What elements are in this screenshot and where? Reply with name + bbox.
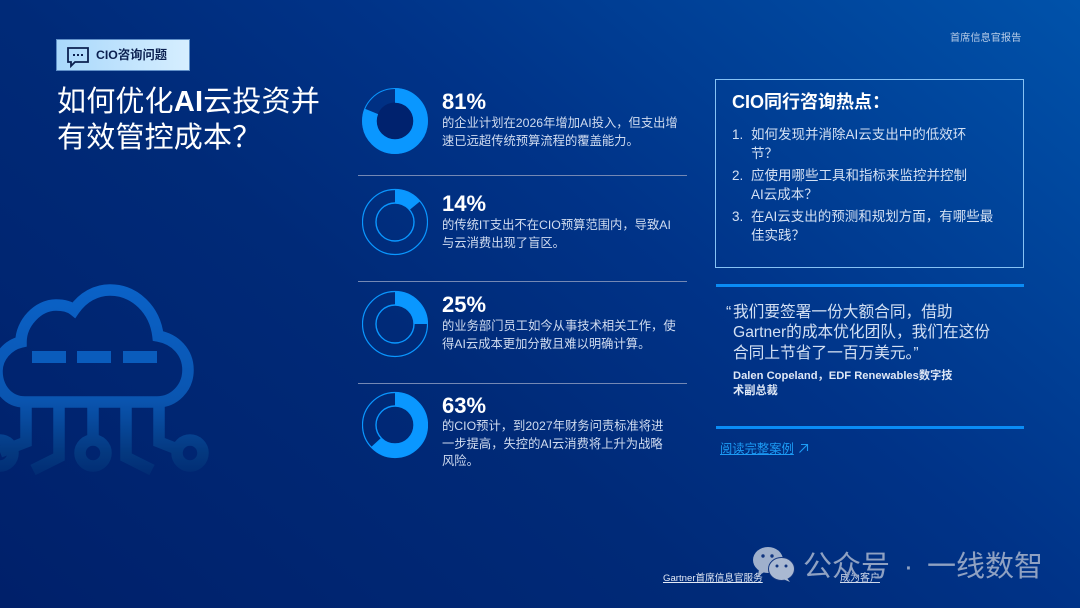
footer link: become client: 成为客户 <box>840 573 880 584</box>
question list: 佳实践？ <box>751 228 805 242</box>
question list: 1. <box>732 127 743 142</box>
icon: cloud network watermark <box>0 284 209 475</box>
title: 如何优化AI云投资并 <box>57 86 320 118</box>
value: 25% <box>442 292 486 317</box>
customer quote <box>726 303 990 362</box>
tag label: CIO咨询问题 <box>96 48 167 62</box>
title: 有效管控成本？ <box>57 122 261 154</box>
tag: CIO咨询问题 <box>56 39 190 71</box>
quote attribution: 术副总裁 <box>733 384 778 396</box>
description: 一步提高，失控的AI云消费将上升为战略 <box>442 436 663 450</box>
description: 的传统IT支出不在CIO预算范围内，导致AI <box>442 218 671 232</box>
panel: peer inquiry hot topics <box>715 79 1024 268</box>
stat: 25% <box>362 290 676 358</box>
description: 得AI云成本更加分散且难以明确计算。 <box>442 337 650 351</box>
question list: 3. <box>732 209 743 224</box>
donut chart: 63% <box>362 392 428 458</box>
quote attribution <box>733 369 952 396</box>
quote rule top <box>716 284 1024 287</box>
description: 的CIO预计，到2027年财务问责标准将进 <box>442 419 663 433</box>
description <box>442 419 663 468</box>
question list: 在AI云支出的预测和规划方面，有哪些最 <box>751 209 993 224</box>
description: 风险。 <box>442 454 479 468</box>
description <box>442 319 676 351</box>
link: read full case: 阅读完整案例 <box>720 442 794 456</box>
customer quote: 我们要签署一份大额合同，借助 <box>733 304 953 320</box>
value: 81% <box>442 89 486 114</box>
description: 速已远超传统预算流程的覆盖能力。 <box>442 134 639 148</box>
question list: 节？ <box>751 146 778 160</box>
value: 14% <box>442 191 486 216</box>
quote rule bottom <box>716 426 1024 429</box>
question list: 2. <box>732 168 743 183</box>
donut chart: 81% <box>362 88 428 154</box>
stat: 63% <box>362 392 663 468</box>
description: 的企业计划在2026年增加AI投入，但支出增 <box>442 116 678 130</box>
stat: 81% <box>362 88 678 154</box>
donut chart: 14% <box>362 188 428 256</box>
description: 的业务部门员工如今从事技术相关工作，使 <box>442 319 676 333</box>
question list <box>732 127 993 242</box>
question list: AI云成本？ <box>751 186 818 202</box>
title <box>57 86 320 154</box>
footer link: Gartner service: Gartner首席信息官服务 <box>663 573 763 584</box>
customer quote: 合同上节省了一百万美元。” <box>733 344 919 362</box>
quote attribution: Dalen Copeland，EDF Renewables数字技 <box>733 370 952 382</box>
icon: external arrow <box>799 444 808 453</box>
watermark: account name: · <box>904 551 913 583</box>
panel heading: CIO同行咨询热点： <box>732 92 890 112</box>
text: “ <box>726 304 731 320</box>
question list: 应使用哪些工具和指标来监控并控制 <box>751 168 967 183</box>
description <box>442 218 671 250</box>
description <box>442 116 678 148</box>
question list: 如何发现并消除AI云支出中的低效环 <box>751 127 966 142</box>
description: 与云消费出现了盲区。 <box>442 236 565 250</box>
value: 63% <box>442 393 486 418</box>
donut chart: 25% <box>362 290 428 358</box>
icon: wechat logo <box>753 547 795 582</box>
header: report name: 首席信息官报告 <box>950 33 1021 44</box>
icon: speech bubble <box>67 47 89 68</box>
watermark: account name: 公众号 一线数智 <box>803 551 1043 583</box>
stat: 14% <box>362 188 671 256</box>
customer quote: Gartner的成本优化团队，我们在这份 <box>733 324 990 341</box>
